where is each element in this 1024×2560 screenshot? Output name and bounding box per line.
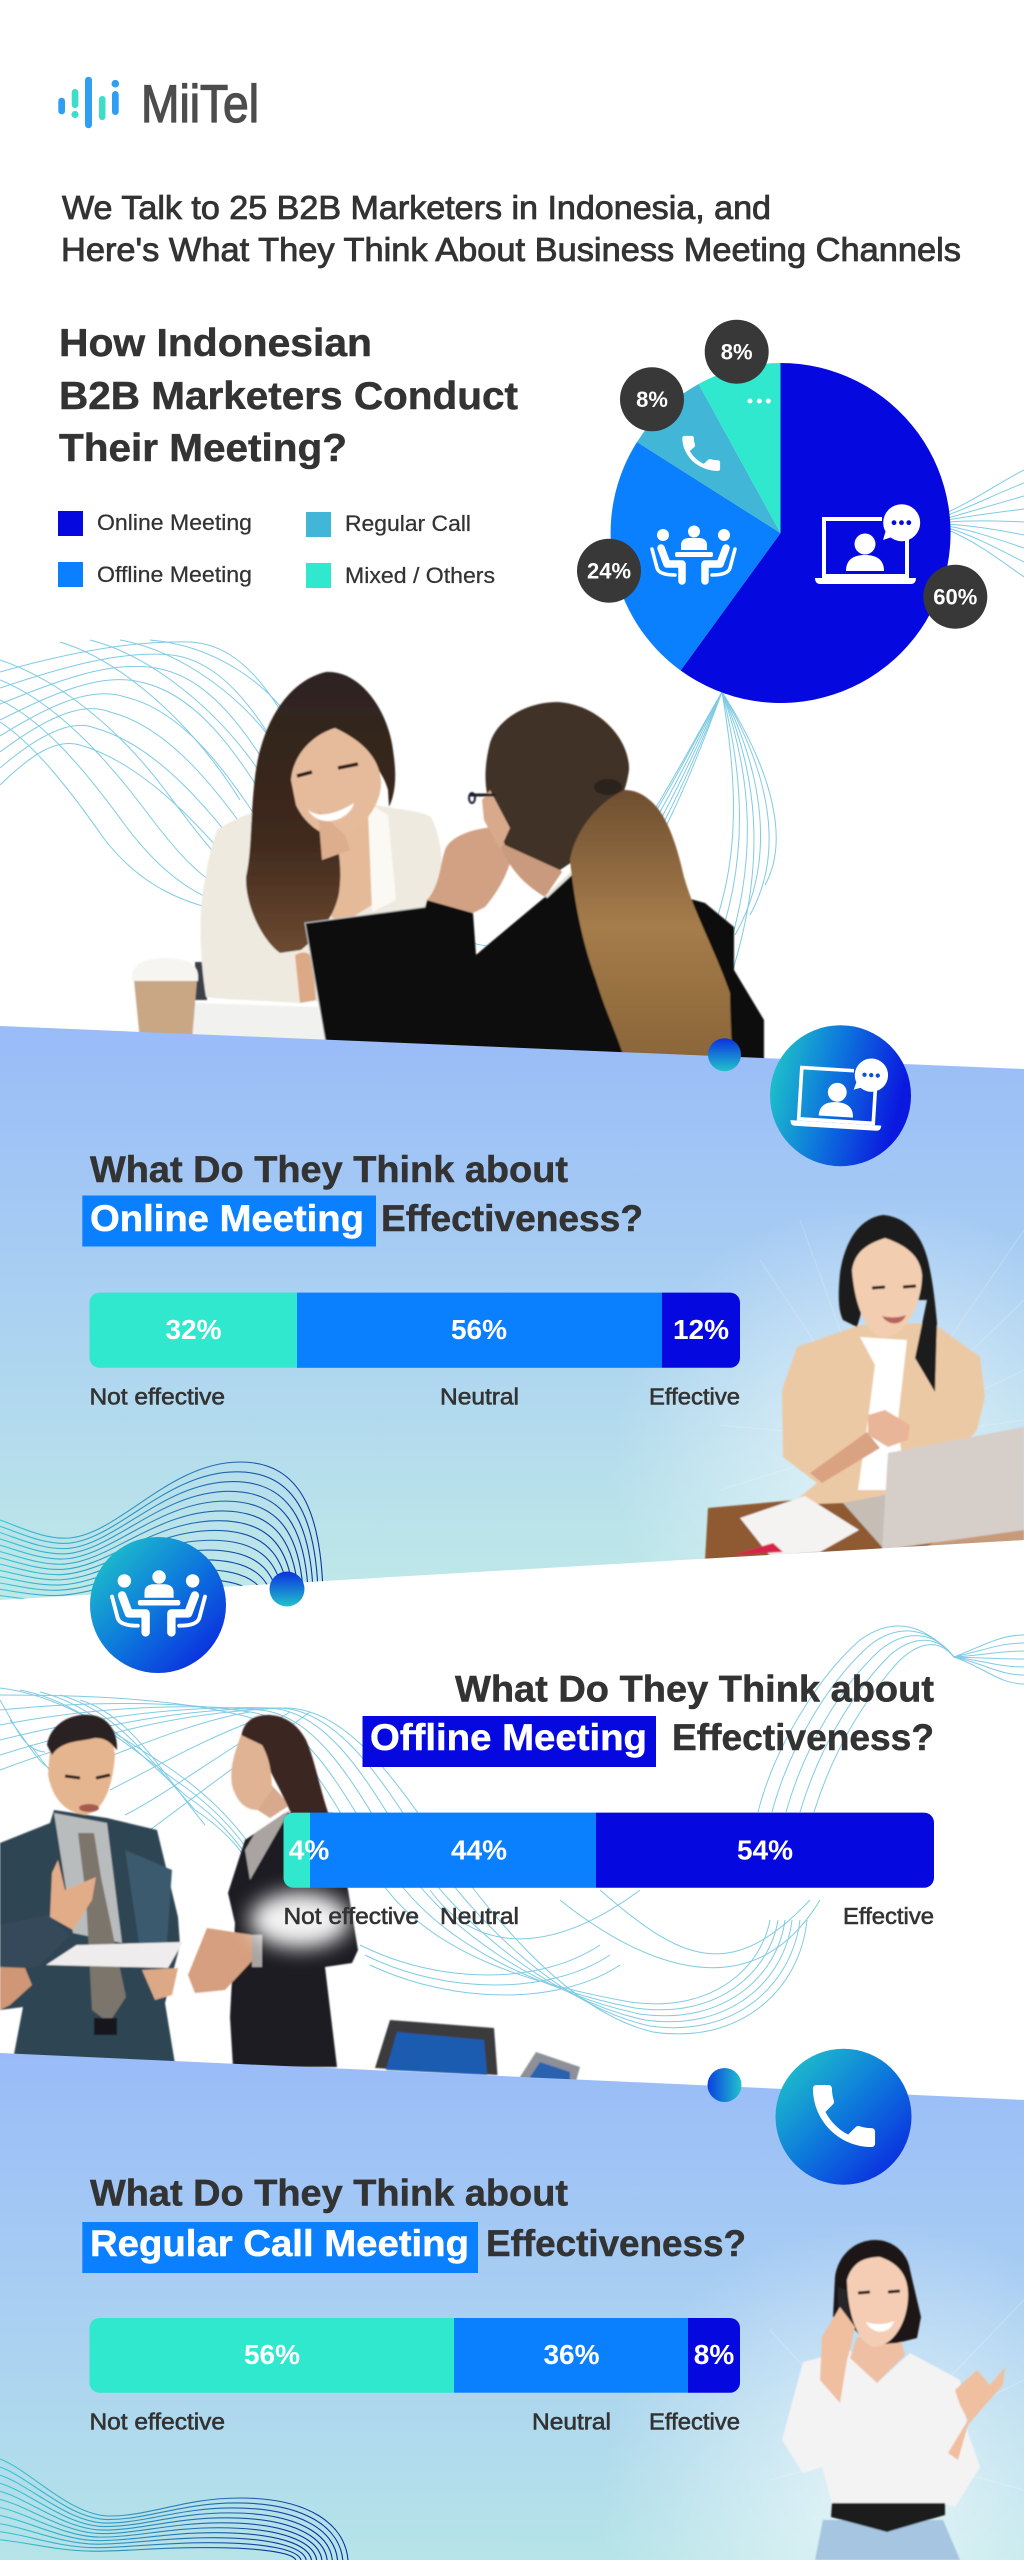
heading: offline meeting: What Do They Think about: [455, 1669, 934, 1710]
subtitle: Here's What They Think About Business Meeting Channels: [61, 231, 961, 268]
heading: What Do They Think about: [90, 1149, 568, 1190]
logo: MiiTel: [58, 75, 259, 134]
heading: How Indonesian B2B Marketers Conduct Their Meeting?: Their Meeting?: [59, 427, 347, 470]
legend: [58, 510, 495, 588]
decorative wave lines: top: [0, 470, 1024, 985]
man: [0, 1715, 183, 2070]
background glow and rays: [0, 2220, 1024, 2560]
highlight: offline meeting: Offline Meeting: [370, 1717, 647, 1758]
stacked bar: online: 12%: [673, 1314, 729, 1345]
badge: 8% mixed: [705, 320, 769, 384]
woman facing camera: [201, 672, 442, 1003]
legend: Mixed / Others: [345, 563, 495, 588]
stacked bar: online: [90, 1293, 740, 1410]
heading: [82, 1149, 643, 1246]
heading: Effectiveness?: [486, 2223, 746, 2264]
stacked bar: regular call: 36%: [543, 2339, 600, 2370]
legend: Online Meeting: [97, 510, 252, 535]
stacked bar: offline: 54%: [737, 1835, 793, 1866]
heading: How Indonesian B2B Marketers Conduct Their Meeting?: [59, 322, 518, 470]
badge: 8% mixed: 8%: [721, 340, 753, 364]
stacked bar: offline: Effective: [843, 1903, 934, 1929]
logo wordmark: MiiTel: [141, 75, 259, 134]
stacked bar: offline: [284, 1813, 934, 1929]
highlight: regular call meeting: Regular Call Meeting: [90, 2223, 469, 2264]
heading: offline meeting: Effectiveness?: [672, 1717, 934, 1758]
subtitle: We Talk to 25 B2B Marketers in Indonesia, and: [62, 189, 771, 226]
badge: 8% call: 8%: [636, 387, 668, 412]
slice: offline meeting 24%: [611, 442, 780, 670]
stacked bar: online: 56%: [451, 1314, 507, 1345]
photo: woman with laptop: [705, 1215, 1024, 1560]
legend: Offline Meeting: [97, 562, 252, 587]
white fade behind label: [250, 1892, 350, 1948]
accent ball: [708, 1038, 741, 1071]
stacked bar: offline: Neutral: [440, 1903, 519, 1929]
icon: dots: [748, 398, 771, 404]
stacked bar: regular call: Effective: [649, 2408, 740, 2434]
stacked bar: offline: 44%: [451, 1835, 507, 1866]
photo: two women at a meeting: [132, 672, 764, 1070]
accent ball: [708, 2068, 742, 2102]
icon circle: laptop call: [770, 1025, 911, 1166]
heading: How Indonesian B2B Marketers Conduct Their Meeting?: How Indonesian: [59, 322, 372, 365]
stacked bar: regular call: Neutral: [532, 2408, 611, 2434]
stacked bar: regular call: 8%: [694, 2339, 734, 2370]
badge: 24% offline: 24%: [587, 558, 631, 584]
legend: Regular Call: [345, 511, 471, 536]
accent ball: [270, 1572, 304, 1606]
subtitle: [61, 189, 961, 268]
dark wave lines: [0, 1462, 324, 1599]
section background: [0, 2053, 1024, 2560]
heading: What Do They Think about: [90, 2173, 568, 2214]
stacked bar: regular call: [90, 2318, 740, 2434]
stacked bar: regular call: Not effective: [90, 2408, 225, 2434]
icon: meeting table: [652, 526, 735, 581]
dark wave lines: [0, 2459, 348, 2560]
photo: man and woman discussing: [0, 1715, 580, 2085]
chairs: [375, 2020, 580, 2085]
highlight: online meeting: Online Meeting: [90, 1198, 364, 1239]
panel: online meeting section: [0, 1025, 1024, 1625]
stacked bar: online: Effective: [649, 1384, 740, 1410]
woman: [188, 1715, 358, 2067]
slice: regular call 8%: [637, 384, 780, 533]
logo icon: sound bars: [58, 77, 119, 128]
photo: woman on the phone: [782, 2240, 1005, 2560]
icon circle: meeting: [90, 1537, 226, 1673]
stacked bar: regular call: 56%: [244, 2339, 300, 2370]
section background: [0, 1026, 1024, 1600]
stacked bar: online: 32%: [165, 1314, 222, 1345]
stacked bar: online: Neutral: [440, 1384, 519, 1410]
slice: mixed 8%: [699, 363, 780, 533]
heading: offline meeting: [362, 1669, 934, 1767]
icon: laptop video call: [815, 504, 920, 584]
heading: Effectiveness?: [381, 1198, 643, 1239]
pie chart: [577, 320, 987, 703]
stacked bar: offline: Not effective: [284, 1903, 419, 1929]
panel: regular call section: [0, 2049, 1024, 2560]
table and coffee: [132, 958, 325, 1045]
laptop: [305, 907, 470, 1045]
icon circle: phone: [776, 2049, 912, 2185]
badge: 60% online: [923, 565, 987, 629]
woman from behind: [372, 702, 764, 1070]
heading: How Indonesian B2B Marketers Conduct Their Meeting?: B2B Marketers Conduct: [59, 375, 518, 418]
icon: phone: [682, 436, 720, 471]
stacked bar: online: Not effective: [90, 1384, 225, 1410]
badge: 60% online: 60%: [933, 584, 977, 610]
background glow and rays: [0, 1200, 1024, 1625]
stacked bar: offline: 4%: [289, 1835, 329, 1866]
slice: online meeting 60%: [681, 363, 951, 703]
badge: 24% offline: [577, 539, 641, 603]
badge: 8% call: [620, 367, 684, 431]
decorative wave lines: offline section: [0, 1626, 1024, 2034]
heading: [82, 2173, 746, 2273]
